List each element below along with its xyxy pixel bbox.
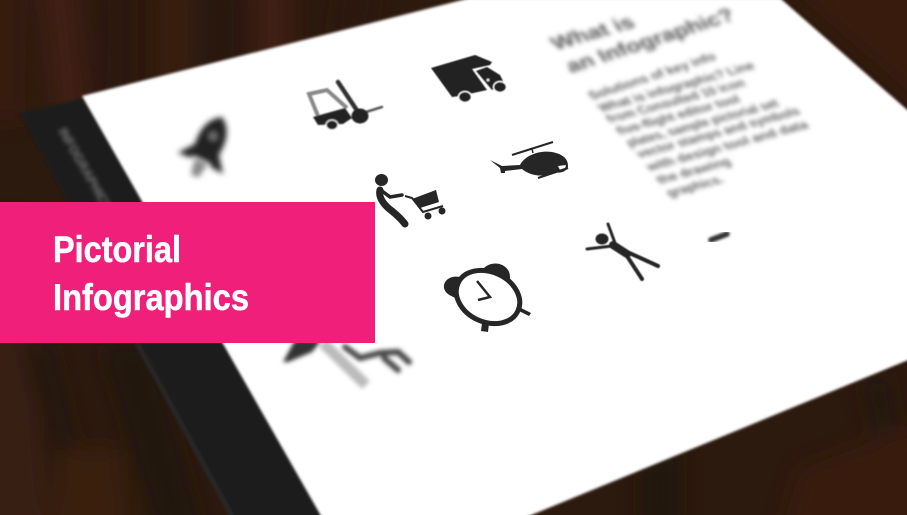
heading: Pictorial Infographics: Infographics bbox=[53, 277, 249, 318]
text block: page description: with design tool and data bbox=[641, 118, 812, 174]
icon: rocket bbox=[172, 107, 245, 187]
text block: page description: vector stamps and symbols bbox=[633, 104, 803, 160]
icon: jumping figure bbox=[587, 224, 658, 279]
text block: page description: from Consulted 10 icon bbox=[603, 76, 749, 125]
icon: blurred reclining figure bbox=[283, 340, 409, 385]
panel: pink title banner bbox=[0, 202, 375, 343]
icon: delivery truck bbox=[431, 55, 506, 102]
heading: What is an Infographic: What is bbox=[547, 12, 639, 54]
icon: dash mark bbox=[711, 234, 727, 240]
heading: What is an Infographic: an Infographic? bbox=[562, 5, 739, 77]
text block: page description: the drawing bbox=[653, 155, 734, 186]
heading: Pictorial Infographics: Pictorial bbox=[53, 229, 181, 270]
text block: page description: What is infographic? Line bbox=[595, 59, 758, 114]
text block: page description: graphics. bbox=[663, 172, 727, 199]
icon: alarm clock bbox=[444, 260, 531, 334]
icon: forklift bbox=[309, 82, 382, 130]
text block: page description: five-flight editor tool bbox=[613, 92, 743, 137]
text block: page description: plates, sample pictorial set bbox=[623, 96, 783, 149]
book spine bbox=[20, 98, 350, 515]
heading: Pictorial Infographics bbox=[53, 229, 249, 318]
icon: helicopter bbox=[490, 142, 568, 178]
spine title text: INFOGRAPHICS GUIDE bbox=[55, 125, 136, 250]
icon: person pushing shopping cart bbox=[375, 174, 446, 224]
text block: page description bbox=[585, 50, 812, 199]
text block: page description: Solutions of key info bbox=[585, 50, 719, 102]
